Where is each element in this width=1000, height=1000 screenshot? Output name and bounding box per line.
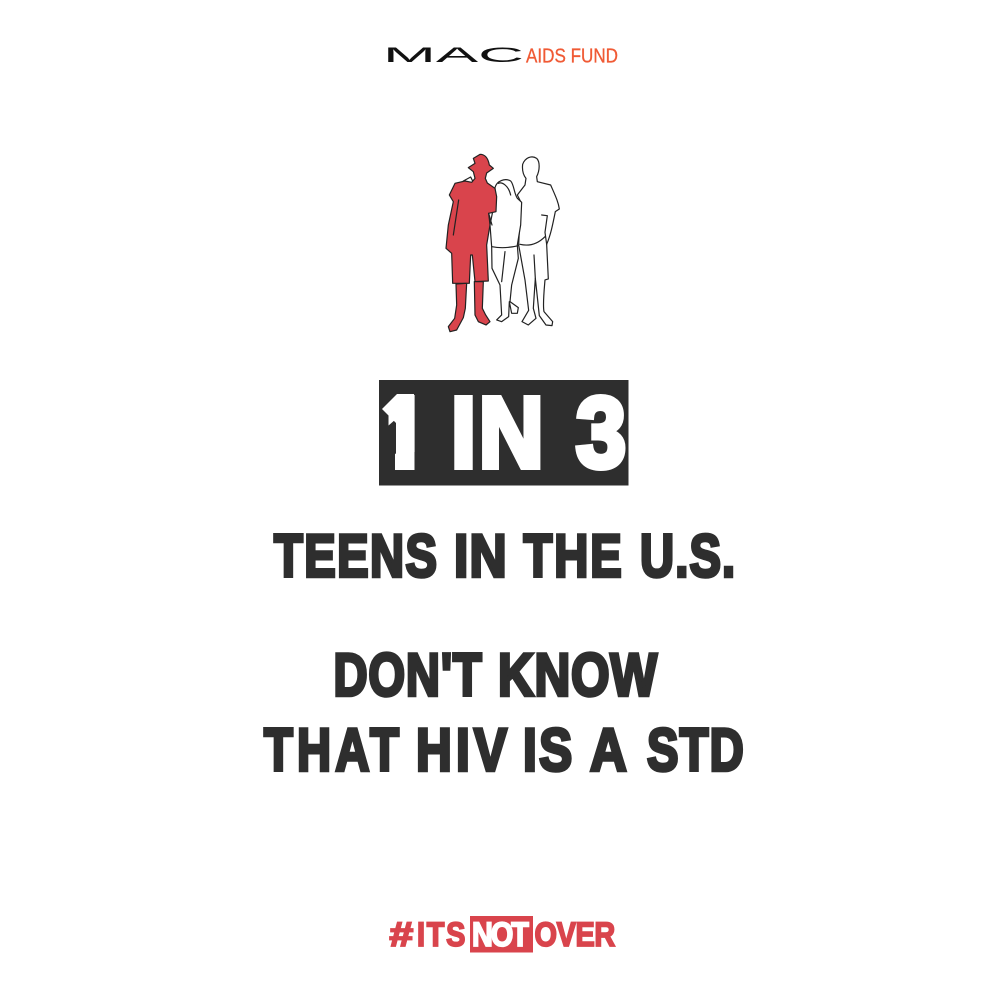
logo wordmark MAC: MAC <box>383 44 524 67</box>
stat text: 1 <box>386 377 426 489</box>
hashtag start: ITS <box>417 915 465 954</box>
stat text: IN <box>451 378 544 489</box>
stat box: 1 IN 3 <box>379 377 628 489</box>
figure: left teen in red <box>446 154 497 332</box>
stat box background <box>379 380 628 486</box>
illustration: three teens, one highlighted <box>446 154 559 332</box>
text line: THAT HIV IS A STD <box>264 715 744 784</box>
hashtag end: OVER <box>534 915 615 954</box>
hashtag: #ITSNOTOVER <box>390 915 615 954</box>
text line: DON'T KNOW <box>334 641 658 709</box>
text line: THAT HIV IS A STD: HIV <box>416 716 507 784</box>
figure: right teen outline <box>517 157 559 326</box>
text line: DON'T KNOW: DON'T <box>334 642 482 709</box>
highlight box <box>470 916 533 952</box>
text line: THAT HIV IS A STD: STD <box>647 717 744 784</box>
figure: middle teen outline <box>490 180 522 322</box>
heading: TEENS IN THE U.S.: IN <box>454 522 507 589</box>
heading: TEENS IN THE U.S. <box>274 522 735 590</box>
stat text: 3 <box>576 378 626 489</box>
stat text <box>386 377 626 489</box>
text line: THAT HIV IS A STD: IS <box>523 716 572 784</box>
heading: TEENS IN THE U.S.: TEENS <box>274 523 437 590</box>
heading: TEENS IN THE U.S.: THE <box>524 523 622 590</box>
heading: TEENS IN THE U.S.: U.S. <box>640 523 735 590</box>
figure: hand on shoulder <box>463 177 473 186</box>
logo: MAC AIDS Fund <box>383 44 618 68</box>
highlighted word NOT: NOT <box>472 915 529 954</box>
hashtag symbol: # <box>390 916 413 954</box>
logo text AIDS FUND: AIDS FUND <box>526 46 618 68</box>
text line: THAT HIV IS A STD: A <box>590 715 627 783</box>
text line: THAT HIV IS A STD: THAT <box>264 717 399 784</box>
text line: DON'T KNOW: KNOW <box>498 641 658 709</box>
